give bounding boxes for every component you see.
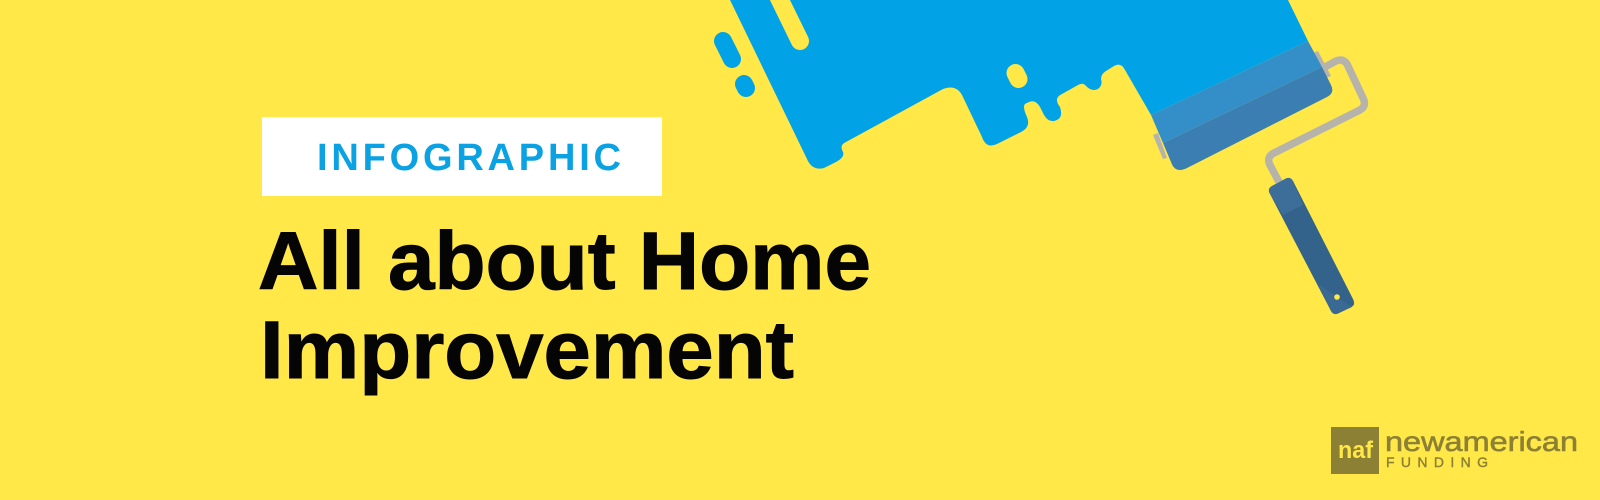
illustration: paint roller with blue paint stroke — [723, 0, 1364, 314]
blue paint drop large — [723, 41, 732, 59]
roller handle — [1269, 178, 1354, 314]
title — [258, 216, 871, 396]
roller end cap right — [1313, 51, 1331, 78]
tag: infographic label — [262, 117, 662, 196]
title: Improvement — [260, 305, 794, 396]
paint stroke — [723, 0, 1308, 169]
yellow streak in paint — [777, 0, 800, 41]
logo square: naf — [1338, 437, 1374, 464]
blue paint drop small — [744, 84, 746, 88]
roller end cap left — [1153, 133, 1167, 159]
tag: infographic label: INFOGRAPHIC — [317, 137, 621, 179]
logo subline: FUNDING — [1386, 454, 1488, 470]
yellow drop in paint — [1016, 73, 1018, 79]
logo wordmark: newamerican — [1385, 426, 1578, 457]
roller frame arm — [1269, 60, 1364, 182]
title: All about Home — [258, 216, 871, 307]
logo: New American Funding — [1331, 426, 1578, 474]
roller sleeve — [1151, 41, 1332, 170]
logo square — [1331, 427, 1379, 474]
